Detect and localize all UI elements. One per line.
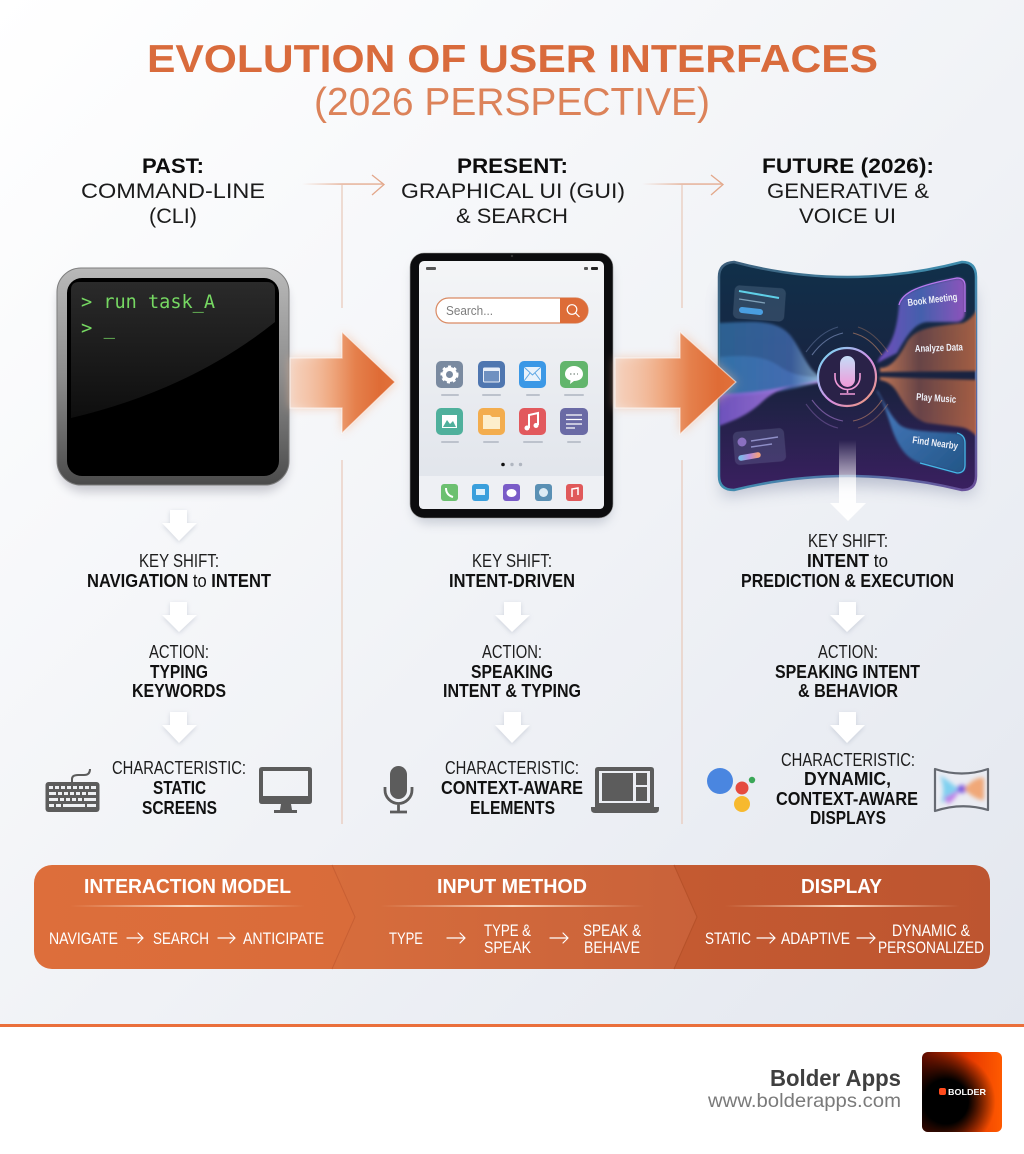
- heading: past: PAST:: [142, 154, 204, 178]
- section: input method: INPUT METHOD: [437, 875, 587, 898]
- present: key shift: INTENT-DRIVEN: [449, 571, 575, 591]
- future: characteristic: DYNAMIC,: [804, 769, 891, 789]
- search bar: Search...: [446, 304, 493, 318]
- section: display: PERSONALIZED: [878, 939, 984, 957]
- right flow ribbons: [877, 278, 978, 473]
- future: key shift: INTENT to: [807, 551, 888, 571]
- brand logo: BOLDER: [948, 1087, 986, 1097]
- present: characteristic: CHARACTERISTIC:: [445, 758, 579, 778]
- present: action: SPEAKING: [471, 662, 553, 682]
- left flow ribbons: [719, 322, 822, 426]
- present: key shift: [449, 551, 575, 591]
- section: display: [705, 875, 984, 957]
- heading: past: COMMAND-LINE: [81, 179, 265, 203]
- title: (2026 PERSPECTIVE): [314, 81, 710, 124]
- past: action: TYPING: [150, 662, 208, 682]
- dock: [419, 476, 604, 509]
- past: action: [132, 642, 226, 701]
- section: interaction model: ANTICIPATE: [243, 930, 324, 948]
- section: input method: SPEAK &: [583, 922, 641, 940]
- icon: microphone: [385, 766, 412, 812]
- brand url: www.bolderapps.com: [707, 1090, 901, 1112]
- microphone orb: [818, 348, 876, 406]
- past: key shift: [87, 551, 271, 591]
- section: interaction model: INTERACTION MODEL: [84, 875, 291, 898]
- future: action: & BEHAVIOR: [798, 681, 898, 701]
- section: interaction model: SEARCH: [153, 930, 209, 948]
- past: characteristic: STATIC: [153, 778, 206, 798]
- terminal screen: > _: [81, 317, 116, 339]
- arrow: future display downward: [830, 440, 866, 521]
- section: input method: SPEAK: [484, 939, 531, 957]
- voice command labels: Analyze Data: [915, 342, 963, 355]
- band chevrons: [332, 865, 990, 969]
- terminal screen: > run task_A: [81, 291, 216, 313]
- icon: keyboard: [46, 769, 100, 812]
- present: action: [443, 642, 581, 701]
- white down arrows: [162, 510, 865, 743]
- section: input method: TYPE: [389, 930, 423, 948]
- arrow: present to future header: [642, 175, 723, 195]
- heading: present: [401, 154, 625, 228]
- past: key shift: NAVIGATION to INTENT: [87, 571, 271, 591]
- voice command labels: Find Nearby: [912, 435, 959, 452]
- present: key shift: KEY SHIFT:: [472, 551, 552, 571]
- icon: assistant dots: [707, 768, 755, 812]
- terminal screen: [57, 268, 289, 492]
- section: display: DYNAMIC &: [892, 922, 970, 940]
- section: display: STATIC: [705, 930, 751, 948]
- present: characteristic: CONTEXT-AWARE: [441, 778, 583, 798]
- heading: future: GENERATIVE &: [767, 179, 929, 203]
- future: action: ACTION:: [818, 642, 878, 662]
- heading: past: [81, 154, 265, 228]
- future: key shift: [741, 531, 954, 591]
- section: input method: TYPE &: [484, 922, 531, 940]
- app icon grid: [436, 361, 588, 443]
- heading: present: & SEARCH: [456, 204, 568, 228]
- past: characteristic: SCREENS: [142, 798, 217, 818]
- future: characteristic: [776, 750, 918, 828]
- present: action: INTENT & TYPING: [443, 681, 581, 701]
- future: key shift: KEY SHIFT:: [808, 531, 888, 551]
- voice command labels: [907, 292, 963, 452]
- brand name: Bolder Apps: [770, 1065, 901, 1091]
- future: action: [775, 642, 920, 701]
- tablet: [410, 253, 613, 524]
- title: [147, 38, 878, 124]
- arrow: present to future: [615, 332, 737, 434]
- heading: present: PRESENT:: [457, 154, 568, 178]
- heading: future: FUTURE (2026):: [762, 154, 934, 178]
- future generative display: [719, 262, 978, 497]
- icon: laptop: [591, 767, 659, 813]
- voice command labels: Book Meeting: [907, 292, 958, 309]
- heading: future: [762, 154, 934, 228]
- past: action: KEYWORDS: [132, 681, 226, 701]
- present: characteristic: [441, 758, 583, 818]
- past: action: ACTION:: [149, 642, 209, 662]
- arrow: past to present: [290, 332, 396, 433]
- section: display: ADAPTIVE: [781, 930, 850, 948]
- brand logo: [922, 1052, 1002, 1132]
- summary band: [34, 865, 990, 969]
- section: input method: [380, 875, 645, 957]
- search bar: [436, 298, 588, 323]
- past: key shift: KEY SHIFT:: [139, 551, 219, 571]
- heading: present: GRAPHICAL UI (GUI): [401, 179, 625, 203]
- heading: future: VOICE UI: [799, 204, 896, 228]
- future: characteristic: DISPLAYS: [810, 808, 886, 828]
- page dots: [501, 463, 522, 466]
- section: display: DISPLAY: [801, 875, 882, 898]
- future: characteristic: CONTEXT-AWARE: [776, 789, 918, 809]
- section: interaction model: NAVIGATE: [49, 930, 118, 948]
- sound wave rings: [806, 327, 888, 428]
- past: characteristic: [112, 758, 246, 818]
- past: characteristic: CHARACTERISTIC:: [112, 758, 246, 778]
- glass cards: [733, 285, 786, 465]
- present: action: ACTION:: [482, 642, 542, 662]
- icon: holographic display: [935, 769, 988, 811]
- future: characteristic: CHARACTERISTIC:: [781, 750, 915, 770]
- present: characteristic: ELEMENTS: [470, 798, 555, 818]
- section: interaction model: [49, 875, 324, 948]
- section: input method: BEHAVE: [584, 939, 640, 957]
- heading: past: (CLI): [149, 204, 197, 228]
- status bar: [426, 267, 598, 270]
- arrow: past to present header: [302, 175, 384, 195]
- column divider lines: [342, 185, 682, 824]
- icon: monitor: [259, 767, 312, 813]
- future: key shift: PREDICTION & EXECUTION: [741, 571, 954, 591]
- footer: [0, 1024, 1024, 1154]
- voice command labels: Play Music: [916, 392, 957, 406]
- title: EVOLUTION OF USER INTERFACES: [147, 38, 878, 81]
- future: action: SPEAKING INTENT: [775, 662, 920, 682]
